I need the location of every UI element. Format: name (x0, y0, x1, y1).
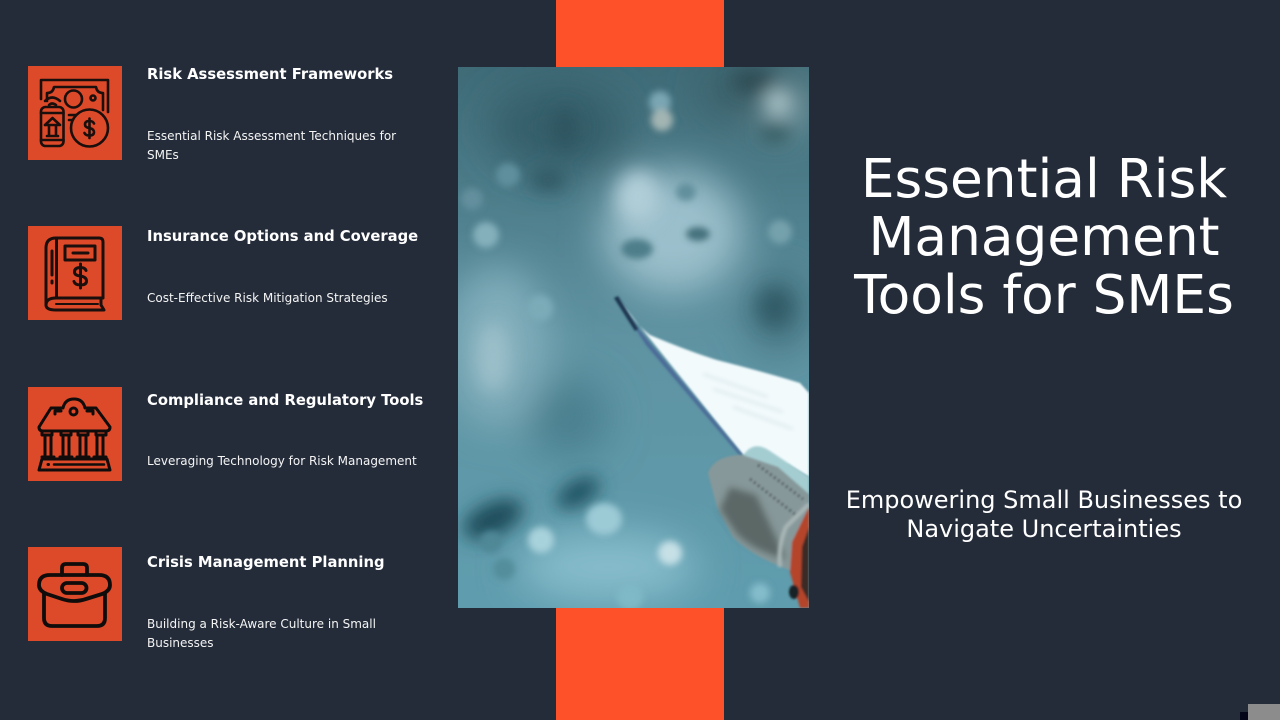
heading: crisis management: Crisis Management Planning (147, 554, 385, 571)
text: compliance: Leveraging Technology for Risk Management (147, 454, 417, 468)
orange vertical band (556, 0, 724, 720)
heading: insurance: Insurance Options and Coverage (147, 228, 418, 245)
paper (614, 296, 809, 477)
heading: compliance: Compliance and Regulatory Tools (147, 392, 423, 409)
icon tile: classical bank building (28, 386, 122, 480)
photo: gloved hand holding a paper against blurred teal background (458, 67, 809, 608)
glove (708, 446, 809, 608)
text: risk assessment: Essential Risk Assessment Techniques for SMEs (147, 129, 396, 162)
icon tile: money, phone and dollar coin (28, 66, 122, 160)
title: Essential Risk Management Tools for SMEs (854, 148, 1234, 326)
text: crisis management: Building a Risk-Aware Culture in Small Businesses (147, 617, 376, 650)
corner marks (1240, 704, 1280, 720)
text: insurance: Cost-Effective Risk Mitigation Strategies (147, 291, 388, 305)
subtitle: Empowering Small Businesses to Navigate Uncertainties (846, 486, 1242, 543)
icon tile: briefcase (28, 547, 122, 641)
icon tile: book with dollar sign (28, 226, 122, 320)
heading: risk assessment: Risk Assessment Frameworks (147, 66, 393, 83)
